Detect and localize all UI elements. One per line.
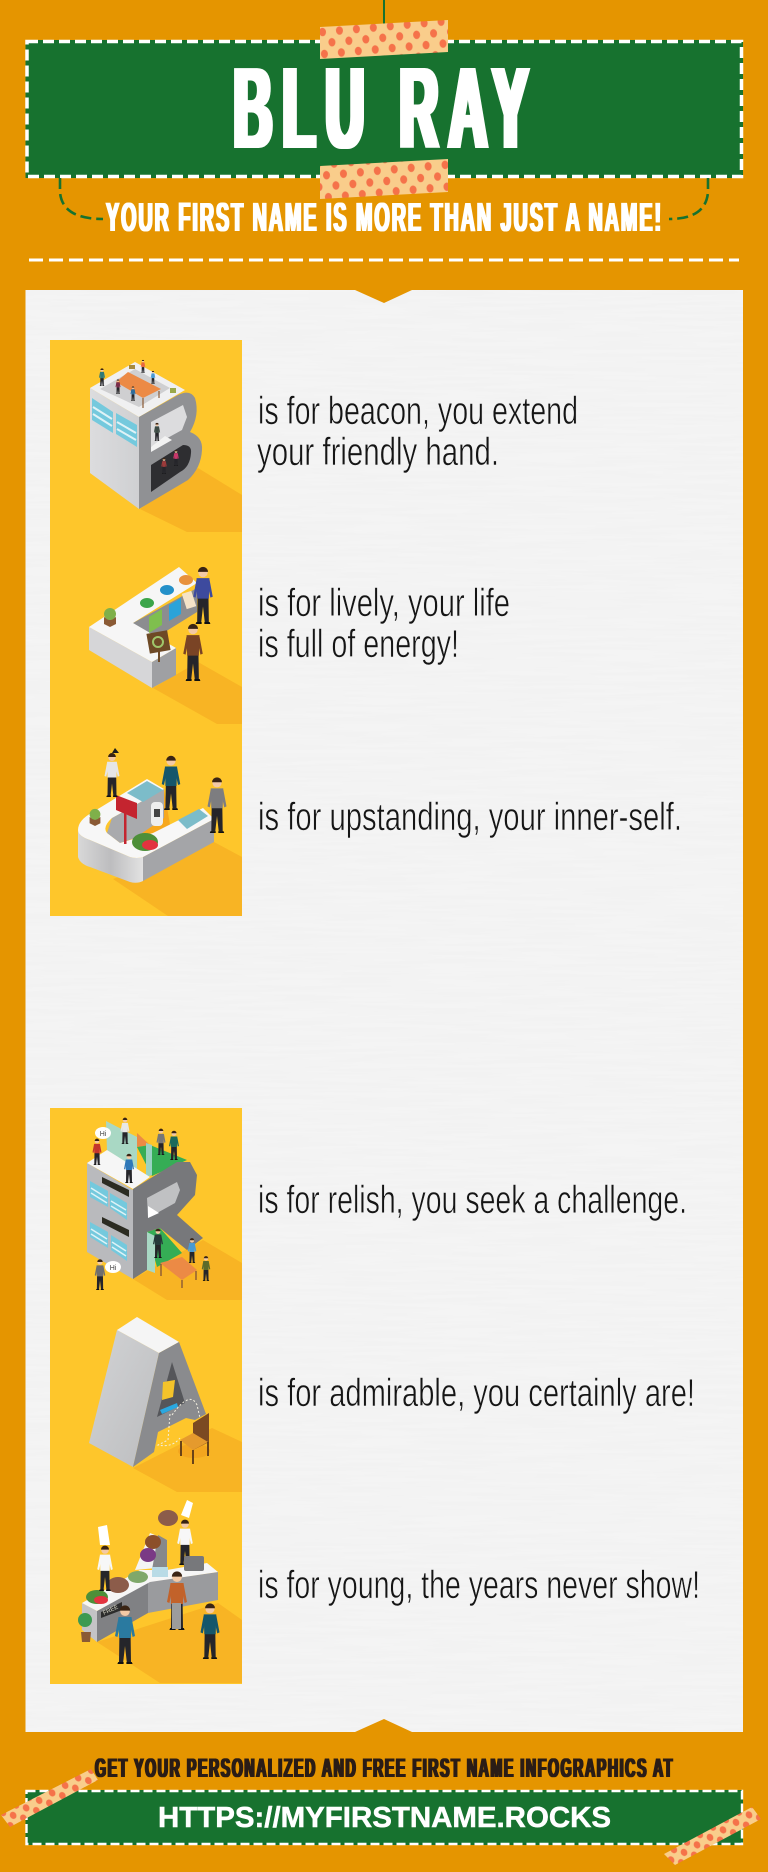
text: L line: is full of energy! [258, 623, 459, 666]
footer banner [1, 1769, 761, 1865]
icon: letter L counter [89, 567, 242, 724]
icon: letter A sculpture [89, 1317, 242, 1492]
left footer tape [1, 1769, 98, 1827]
icon: letter B building [90, 360, 242, 532]
FREE sign [101, 1602, 122, 1618]
FREE sign: FREE [102, 1605, 119, 1617]
speech bubble [105, 1261, 121, 1273]
text: B line: your friendly hand. [257, 431, 499, 474]
chef [97, 1525, 113, 1591]
panel: first word strip [50, 340, 242, 916]
icon: letter R building [87, 1118, 242, 1300]
left bracket [60, 178, 103, 219]
right bracket [669, 178, 708, 219]
dashed banner border [27, 42, 742, 176]
icon: letter Y buffet [78, 1500, 242, 1683]
footer URL: HTTPS://MYFIRSTNAME.ROCKS [158, 1802, 611, 1834]
hanging string [383, 0, 385, 24]
title banner [26, 20, 743, 199]
text: L line: is for lively, your life [258, 582, 510, 625]
text: B line [257, 390, 578, 474]
speech bubble: Hi [110, 1265, 117, 1272]
bottom tape [320, 159, 448, 199]
top tape [320, 20, 448, 59]
white content panel [26, 290, 743, 1732]
text: L line [258, 582, 510, 666]
right footer tape [664, 1807, 761, 1865]
speech bubble [95, 1127, 111, 1139]
speech bubble: Hi [100, 1131, 107, 1138]
icon: letter U counter [78, 748, 242, 916]
green banner panel [26, 40, 743, 178]
text: B line: is for beacon, you extend [258, 390, 578, 433]
panel: second word strip [50, 1108, 242, 1684]
